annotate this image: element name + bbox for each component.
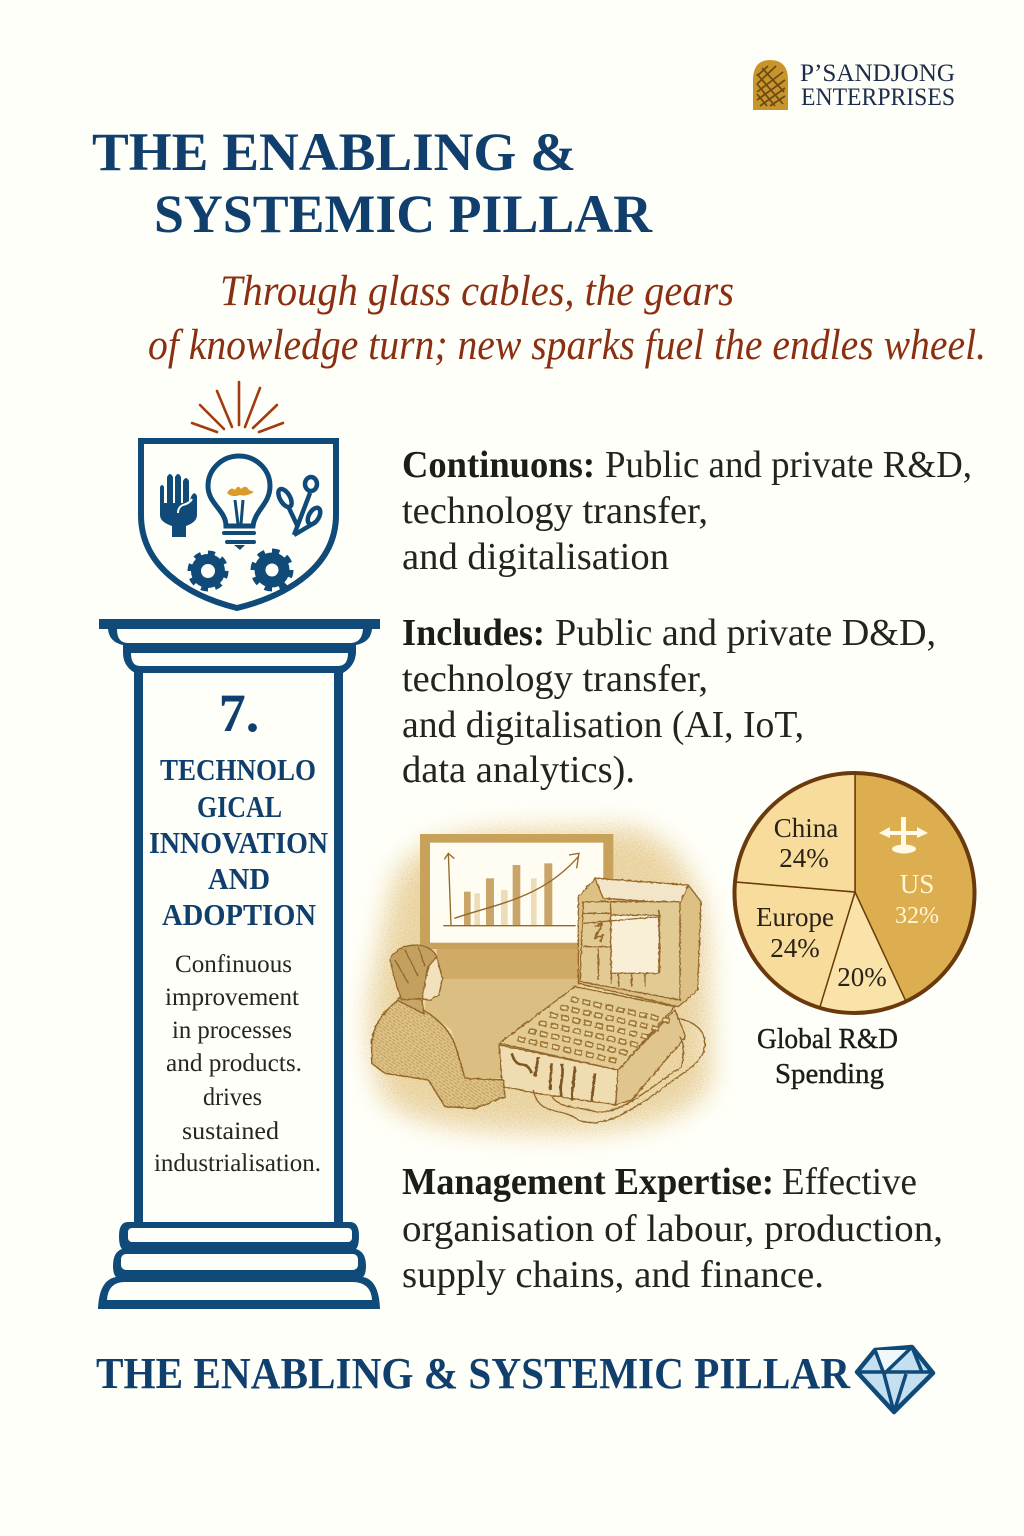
wall band and floor bbox=[425, 949, 578, 1078]
pie labels: 24% bbox=[779, 843, 829, 873]
footer heading: THE ENABLING & SYSTEMIC PILLAR bbox=[96, 1349, 851, 1398]
pillar description: industrialisation. bbox=[154, 1150, 321, 1177]
shield emblem bbox=[141, 441, 336, 608]
text block: management expertise: Management Expertise: bbox=[402, 1161, 774, 1203]
pie outline bbox=[734, 773, 974, 1013]
pillar base bbox=[98, 1222, 380, 1309]
text block: includes: data analytics). bbox=[402, 749, 635, 791]
pillar bbox=[98, 619, 380, 1309]
icon: left gear bbox=[190, 553, 226, 589]
computer machine bbox=[499, 878, 705, 1123]
pillar heading: AND bbox=[208, 861, 270, 896]
text block: includes: Includes: bbox=[402, 612, 545, 654]
pillar description: Confinuous bbox=[175, 951, 292, 978]
pie slices bbox=[736, 775, 972, 1011]
text block: includes bbox=[402, 612, 936, 791]
pillar capital bbox=[99, 619, 380, 673]
pillar description: improvement bbox=[165, 984, 299, 1011]
pillar description bbox=[154, 951, 321, 1177]
icon: diamond bbox=[857, 1347, 933, 1412]
text block: includes: and digitalisation (AI, IoT, bbox=[402, 704, 804, 746]
title bbox=[92, 122, 653, 244]
whiteboard with chart bbox=[420, 834, 613, 949]
sepia vignette bbox=[372, 830, 708, 1130]
text block: continuons: and digitalisation bbox=[402, 536, 669, 578]
logo: P'Sandjong Enterprises bbox=[753, 60, 955, 111]
pillar shaft bbox=[138, 670, 338, 1226]
chart caption: Spending bbox=[775, 1058, 884, 1090]
pillar description: sustained bbox=[182, 1118, 280, 1145]
illustration: man at machine with chart bbox=[372, 830, 708, 1130]
icon: hand bbox=[160, 474, 197, 537]
pillar number: 7. bbox=[219, 683, 259, 743]
pie labels: 20% bbox=[837, 962, 887, 992]
pie chart: global R&D spending bbox=[732, 771, 976, 1015]
pie labels: 24% bbox=[770, 933, 820, 963]
chart caption bbox=[757, 1023, 898, 1090]
pillar heading: GICAL bbox=[197, 789, 282, 824]
pillar heading: ADOPTION bbox=[162, 897, 316, 932]
pie labels: US bbox=[900, 869, 934, 899]
icon: right gear bbox=[253, 551, 291, 589]
text block: continuons: technology transfer, bbox=[402, 490, 708, 532]
text block: management expertise bbox=[402, 1161, 943, 1296]
pie labels: China bbox=[774, 813, 838, 843]
pie labels: Europe bbox=[756, 902, 834, 932]
pie labels: 32% bbox=[895, 903, 939, 929]
tagline: Through glass cables, the gears bbox=[220, 268, 734, 315]
icon: sun rays bbox=[192, 382, 283, 432]
text block: continuons: Public and private R&D, bbox=[605, 444, 972, 486]
pillar description: in processes bbox=[172, 1017, 292, 1044]
text block: continuons: Continuons: bbox=[402, 444, 595, 486]
pillar description: and products. bbox=[166, 1050, 302, 1077]
icon: light bulb bbox=[208, 456, 270, 550]
logo name bbox=[800, 60, 955, 111]
pie labels bbox=[756, 813, 939, 992]
icon: golden arch seal bbox=[753, 60, 788, 110]
man seated bbox=[372, 945, 505, 1108]
tagline bbox=[148, 268, 986, 369]
text block: includes: technology transfer, bbox=[402, 658, 708, 700]
text block: management expertise: supply chains, and finance. bbox=[402, 1254, 824, 1296]
pillar heading: INNOVATION bbox=[149, 825, 328, 860]
icon: sprout bbox=[276, 477, 323, 535]
text block: management expertise: organisation of labour, production, bbox=[402, 1208, 943, 1250]
chart caption: Global R&D bbox=[757, 1023, 898, 1055]
logo name: ENTERPRISES bbox=[801, 84, 955, 111]
pillar description: drives bbox=[203, 1084, 262, 1111]
text block: continuons bbox=[402, 444, 972, 578]
text block: management expertise: Effective bbox=[782, 1161, 917, 1203]
title: THE ENABLING & bbox=[92, 122, 576, 182]
pillar heading bbox=[149, 752, 328, 932]
pillar heading: TECHNOLO bbox=[160, 752, 316, 787]
text block: includes: Public and private D&D, bbox=[555, 612, 936, 654]
title: SYSTEMIC PILLAR bbox=[154, 184, 653, 244]
logo name: P’SANDJONG bbox=[800, 60, 955, 87]
icon: compass cross bbox=[879, 817, 928, 854]
